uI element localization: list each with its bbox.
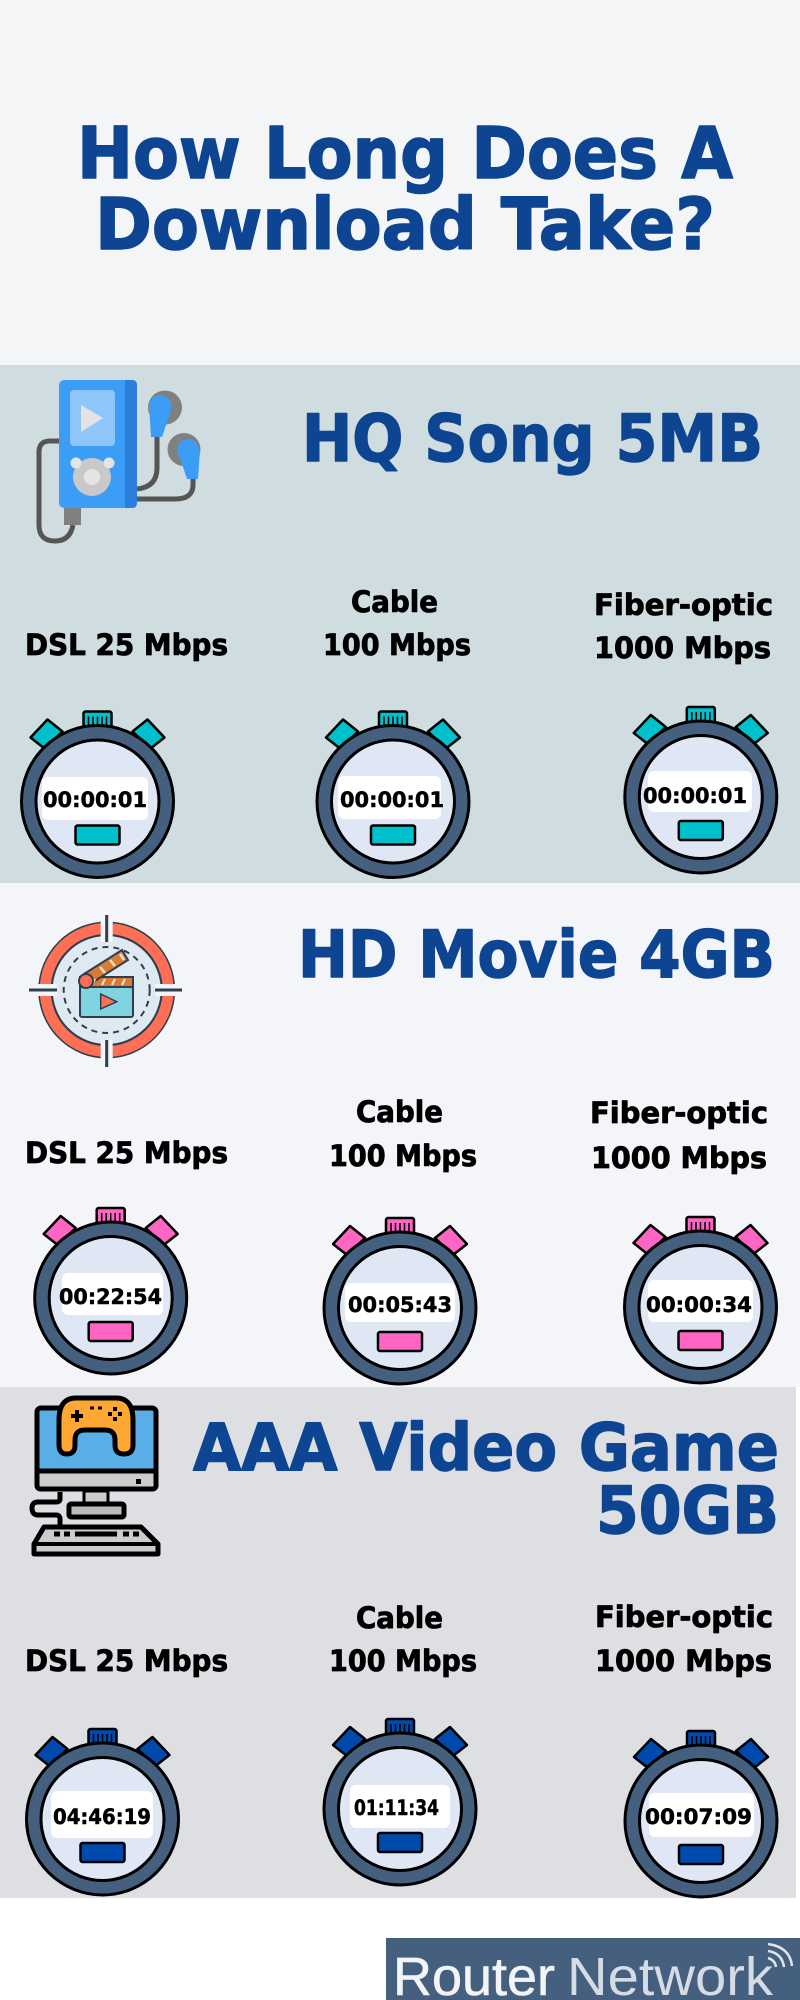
icon: gaming computer xyxy=(32,1398,158,1554)
label: Fiber-optic xyxy=(595,1600,773,1678)
label: DSL: DSL 25 Mbps xyxy=(25,1136,228,1170)
label: Fiber-optic: Fiber-optic xyxy=(594,588,773,622)
label: Cable: Cable xyxy=(351,585,438,619)
label: Cable: Cable xyxy=(356,1601,443,1635)
stopwatch: DSL game xyxy=(26,1729,178,1895)
logo: RouterNetwork xyxy=(386,1938,800,2000)
title xyxy=(77,112,733,266)
label: Cable: Cable xyxy=(356,1095,443,1129)
stopwatch: Cable movie xyxy=(324,1218,476,1384)
stopwatch: DSL song xyxy=(22,712,174,878)
panel: HQ Song 5MB xyxy=(0,365,800,883)
stopwatch: Cable movie: 00:05:43 xyxy=(348,1293,452,1317)
label: DSL: DSL 25 Mbps xyxy=(25,628,228,662)
label: Fiber-optic: 1000 Mbps xyxy=(595,1644,772,1678)
stopwatch: Fiber game xyxy=(625,1731,777,1897)
section heading: 50GB xyxy=(596,1474,779,1549)
stopwatch: Fiber song xyxy=(625,707,777,873)
panel: HD Movie 4GB xyxy=(0,883,800,1387)
icon: film target xyxy=(29,915,182,1067)
label: Cable xyxy=(329,1601,477,1678)
stopwatch: DSL movie xyxy=(35,1208,187,1374)
section heading xyxy=(193,1411,779,1549)
label: Fiber-optic: 1000 Mbps xyxy=(591,1141,767,1175)
label: Fiber-optic: 1000 Mbps xyxy=(594,631,771,665)
label: Cable: 100 Mbps xyxy=(329,1644,477,1678)
stopwatch: Fiber movie: 00:00:34 xyxy=(646,1293,752,1317)
label: Cable: 100 Mbps xyxy=(323,628,471,662)
label: Cable: 100 Mbps xyxy=(329,1139,477,1173)
stopwatch: Fiber game: 00:07:09 xyxy=(645,1805,752,1829)
panel: page header xyxy=(0,0,800,366)
title: How Long Does A xyxy=(77,112,733,195)
label: Fiber-optic xyxy=(594,588,773,665)
stopwatch: DSL movie: 00:22:54 xyxy=(59,1285,162,1309)
label: Cable xyxy=(329,1095,477,1173)
section heading: AAA Video Game xyxy=(193,1411,779,1486)
icon: MP3 player with earphones xyxy=(39,380,200,541)
stopwatch: Cable song: 00:00:01 xyxy=(340,788,444,812)
label: Cable xyxy=(323,585,471,662)
stopwatch: Fiber song: 00:00:01 xyxy=(643,784,747,808)
label: Fiber-optic: Fiber-optic xyxy=(590,1096,768,1130)
stopwatch: Fiber movie xyxy=(624,1217,776,1383)
label: Fiber-optic: Fiber-optic xyxy=(595,1600,773,1634)
stopwatch: DSL song: 00:00:01 xyxy=(43,788,147,812)
stopwatch: Cable game: 01:11:34 xyxy=(354,1796,439,1820)
label: Fiber-optic xyxy=(590,1096,768,1175)
title: Download Take? xyxy=(95,183,715,266)
section heading: HQ Song 5MB xyxy=(302,402,763,477)
stopwatch: DSL game: 04:46:19 xyxy=(53,1805,151,1829)
stopwatch: Cable song xyxy=(317,712,469,878)
stopwatch: Cable game xyxy=(324,1719,476,1885)
panel: AAA Video Game 50GB xyxy=(0,1387,796,1898)
label: DSL: DSL 25 Mbps xyxy=(25,1644,228,1678)
